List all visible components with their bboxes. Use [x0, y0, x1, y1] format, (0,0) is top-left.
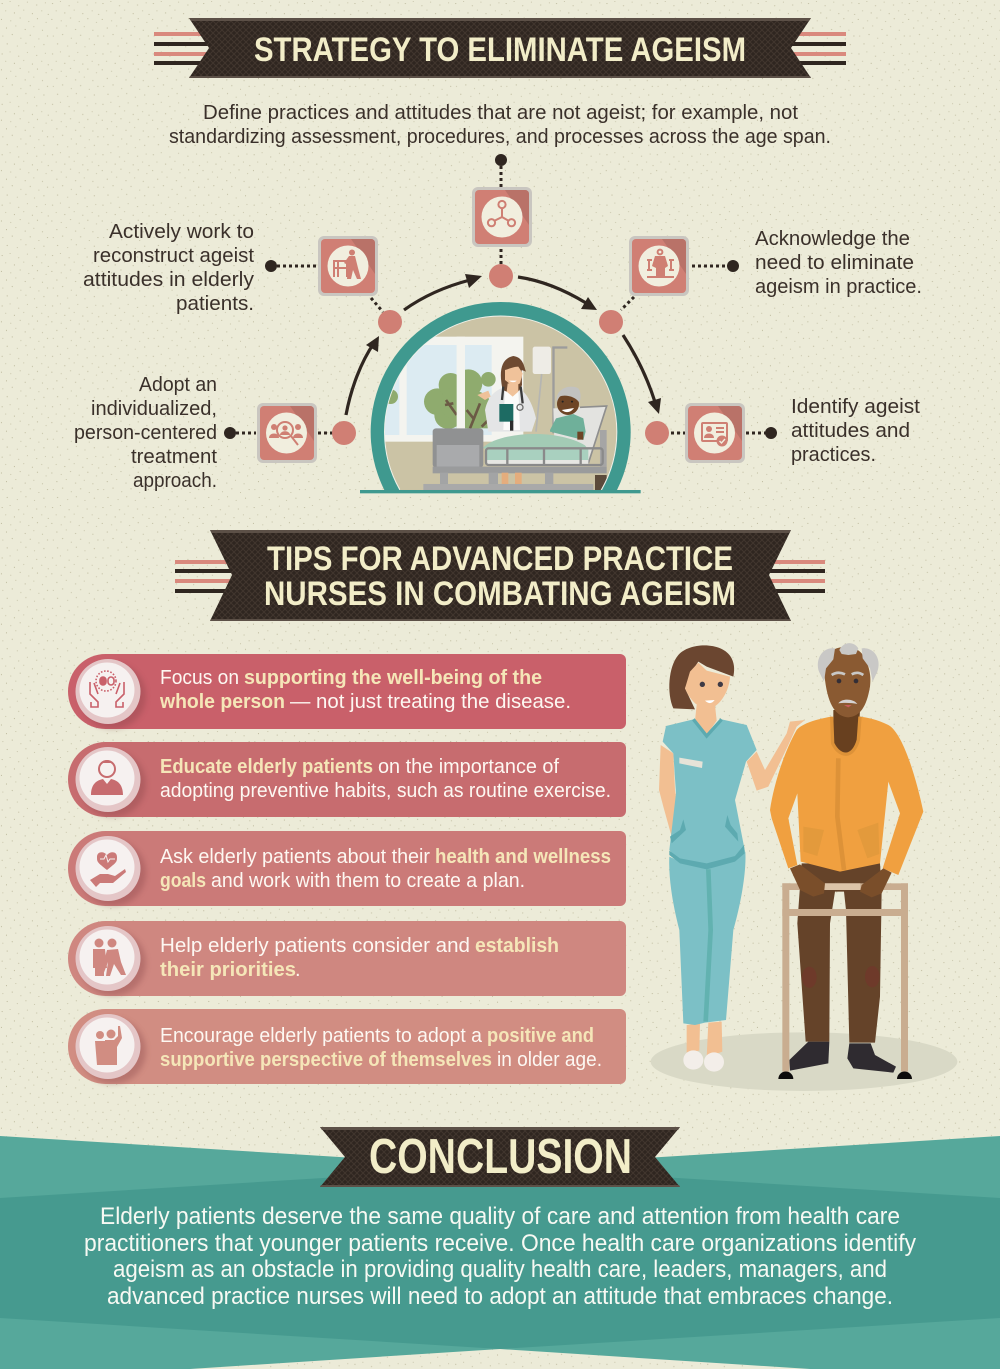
label: adopt an individualized approach: individualized, — [91, 398, 217, 420]
node circles — [332, 264, 669, 445]
icon: walker — [318, 236, 378, 296]
tip 4: their priorities — [160, 959, 296, 981]
ground shadow — [651, 1032, 957, 1091]
icon: people under magnifier — [257, 403, 317, 463]
label: acknowledge the need: need to eliminate — [755, 252, 914, 274]
arrows around dome — [346, 274, 661, 415]
tip 3: goals — [160, 870, 206, 892]
conclusion text: ageism as an obstacle in providing quality health care, leaders, managers, and — [113, 1256, 887, 1283]
walker — [782, 883, 908, 1072]
tip 2 — [68, 742, 626, 817]
conclusion text — [84, 1203, 916, 1310]
label: adopt an individualized approach: treatment — [131, 446, 217, 468]
tip 1: supporting the well-being of the — [244, 667, 542, 689]
label: adopt an individualized approach: Adopt an — [139, 374, 217, 396]
tip 5: positive and — [487, 1025, 594, 1047]
tip 2: adopting preventive habits, such as routine exercise. — [160, 780, 611, 802]
label: actively work: patients. — [176, 293, 254, 315]
tip 5 — [68, 1009, 626, 1084]
title banner: strategy — [154, 18, 846, 78]
tip 3: and work with them to create a plan. — [211, 870, 525, 892]
intro text — [169, 102, 831, 148]
section banner: tips: TIPS FOR ADVANCED PRACTICE — [267, 540, 733, 578]
tip 2: on the importance of — [378, 756, 559, 778]
illustration: dome with hospital scene — [360, 302, 641, 493]
intro text: standardizing assessment, procedures, and processes across the age span. — [169, 126, 831, 148]
tip 4 — [68, 921, 626, 996]
label: adopt an individualized approach: person-centered — [74, 422, 217, 444]
icon: person with bars — [629, 236, 689, 296]
dotted connectors — [224, 154, 777, 439]
tip 5: Encourage elderly patients to adopt a — [160, 1025, 483, 1047]
label: adopt an individualized approach — [74, 374, 217, 492]
tip 1: Focus on — [160, 667, 239, 689]
label: identify ageist attitudes: Identify ageist — [791, 396, 920, 418]
tip 1 — [68, 654, 626, 729]
conclusion banner: CONCLUSION — [369, 1130, 632, 1184]
icon: heart over hand — [90, 852, 126, 887]
tip 1: whole person — [159, 691, 285, 713]
section banner: tips — [175, 530, 825, 621]
nurse — [659, 645, 805, 1072]
tip 5: in older age. — [497, 1049, 602, 1071]
label: acknowledge the need — [755, 228, 922, 298]
label: actively work — [83, 221, 254, 315]
tip 5: supportive perspective of themselves — [160, 1049, 492, 1071]
icon: id card with check — [685, 403, 745, 463]
tip 1: — not just treating the disease. — [290, 691, 571, 713]
label: actively work: attitudes in elderly — [83, 269, 254, 291]
icon: nurse bust — [91, 760, 123, 795]
tip 4: . — [295, 959, 301, 981]
section banner: tips: NURSES IN COMBATING AGEISM — [264, 575, 736, 613]
illustration: nurse and elderly man with walker — [651, 643, 957, 1091]
label: acknowledge the need: Acknowledge the — [755, 228, 910, 250]
icon: two elderly people — [93, 938, 126, 976]
tip 3: health and wellness — [435, 846, 611, 868]
label: actively work: Actively work to — [109, 221, 254, 243]
icon: two people arm raised — [95, 1026, 122, 1065]
icon: network — [472, 187, 532, 247]
tip 3 — [68, 831, 626, 906]
title banner: strategy: STRATEGY TO ELIMINATE AGEISM — [254, 31, 746, 69]
tip 2: Educate elderly patients — [160, 756, 373, 778]
tip 4: Help elderly patients consider and — [160, 935, 470, 957]
label: adopt an individualized approach: approach. — [133, 470, 217, 492]
man with walker — [770, 643, 923, 1079]
label: identify ageist attitudes: practices. — [791, 444, 876, 466]
label: identify ageist attitudes: attitudes and — [791, 420, 910, 442]
conclusion teal band — [0, 1136, 1000, 1369]
tip 4: establish — [475, 935, 559, 957]
label: actively work: reconstruct ageist — [93, 245, 254, 267]
icon: hands holding pills — [90, 671, 124, 707]
intro text: Define practices and attitudes that are not ageist; for example, not — [203, 102, 798, 124]
conclusion text: advanced practice nurses will need to adopt an attitude that embraces change. — [107, 1283, 893, 1310]
label: identify ageist attitudes — [791, 396, 920, 466]
conclusion text: Elderly patients deserve the same quality of care and attention from health care — [100, 1203, 900, 1230]
conclusion text: practitioners that younger patients receive. Once health care organizations identify — [84, 1230, 916, 1257]
label: acknowledge the need: ageism in practice. — [755, 276, 922, 298]
tip 3: Ask elderly patients about their — [160, 846, 430, 868]
